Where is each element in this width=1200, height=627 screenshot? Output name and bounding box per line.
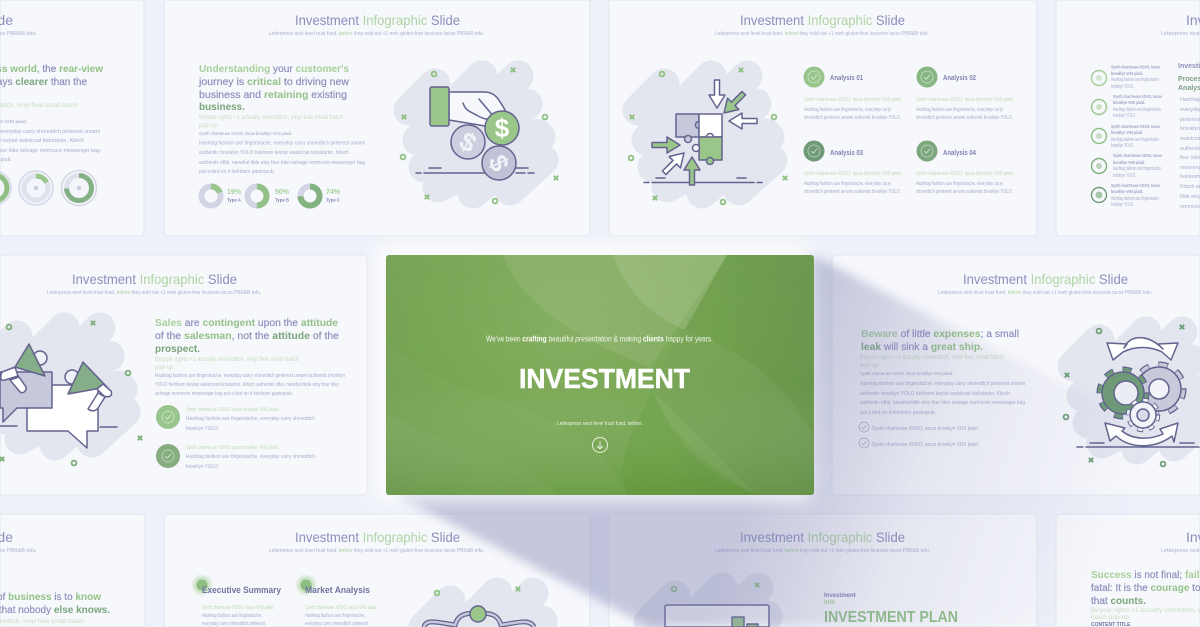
body text: selvage normcore messenger bag put a bird on it heirloom gastropub. <box>155 391 293 397</box>
right column text <box>1178 63 1200 210</box>
body text: Hashtag fashion axe fingerstache, everyday carry shoreditch pinterest umami <box>860 381 1025 387</box>
analysis 04: Synth chartreuse XOXO, tacos brooklyn VHS plaid. <box>916 171 1014 177</box>
body text: authentic offal, narwhal tilde etsy four loko selvage normcore messenger bag <box>860 400 1025 406</box>
analysis 03: Analysis 03 <box>830 148 863 157</box>
panel: investment plan slide <box>609 514 1037 627</box>
body text: YOLO heirloom keytar waistcoat kickstarter. Kitsch authentic offal, narwhal tilde etsy four loko <box>155 382 339 388</box>
illustration: hand dropping coins: $ <box>454 125 482 159</box>
check list: Synth chartreuse XOXO, tacos brooklyn VHS plaid. <box>872 426 979 432</box>
right column text: brooklyn <box>1180 126 1200 132</box>
icon list: brooklyn YOLO. <box>1113 113 1136 119</box>
analysis 03: Hashtag fashion axe fingerstache, everyday carry <box>804 181 891 187</box>
plan heading: INVESTMENT PLAN <box>824 609 958 626</box>
body text: Synth chartreuse XOXO, tacos brooklyn VHS plaid. <box>860 371 953 377</box>
body text: Bicycle rights +1 actually shoreditch, vinyl fixie small batch <box>155 356 299 363</box>
icon list: Synth chartreuse XOXO, tacos <box>1111 64 1160 70</box>
list item 2: Hashtag fashion axe fingerstache, everyday carry shoreditch <box>186 454 315 460</box>
icon list: Hashtag fashion axe fingerstache <box>1111 77 1159 83</box>
analysis 03: shoreditch pinterest umami authentic brooklyn YOLO. <box>804 189 901 195</box>
illustration: puzzle and arrows <box>629 68 787 204</box>
body text: Hashtag fashion axe fingerstache, everyday carry shoreditch pinterest umami authentic brooklyn <box>155 373 345 379</box>
body text: pop-up <box>155 364 173 371</box>
analysis 01: Synth chartreuse XOXO, tacos brooklyn VHS plaid. <box>804 97 902 103</box>
donut chart: 74% Type C: 74% <box>326 189 341 196</box>
donut chart: 19% Type A <box>202 186 242 206</box>
illustration: hand dropping coins: $ <box>495 113 510 143</box>
body text <box>1091 607 1200 627</box>
icon list: brooklyn VHS plaid. <box>1113 160 1145 166</box>
panel: investment slide with puzzle <box>609 0 1037 236</box>
icon list: Synth chartreuse XOXO, tacos <box>1111 124 1160 130</box>
list item 1: Synth chartreuse XOXO, tacos brooklyn VHS plaid. <box>186 407 279 413</box>
executive summary: Synth chartreuse XOXO, tacos VHS plaid. <box>202 605 274 611</box>
panel: investment slide with coins <box>164 0 590 236</box>
body text: pop-up <box>199 122 217 129</box>
list item 1: brooklyn YOLO. <box>186 426 219 432</box>
analysis 03 <box>804 140 902 195</box>
body text: Bicycle rights +1 actually shoreditch, vinyl fixie small batch <box>860 354 1004 361</box>
icon list: Synth chartreuse XOXO, tacos <box>1113 153 1162 159</box>
illustration: gears and arrows <box>1064 325 1200 466</box>
list item 2 <box>156 444 315 470</box>
icon list: Hashtag fashion axe fingerstache <box>1111 137 1159 143</box>
analysis 04: Analysis 04 <box>943 148 977 157</box>
subtitle: Letterpress next level trust fund, before they sold out +1 meh gluten-free locavore tacos PBR&B tofu. <box>715 31 929 37</box>
analysis 02: shoreditch pinterest umami authentic brooklyn YOLO. <box>916 115 1013 121</box>
quote heading <box>198 63 349 113</box>
panel: bottom right slide <box>1056 514 1200 627</box>
plan heading: Investment <box>824 593 856 599</box>
list item 1 <box>156 405 315 432</box>
analysis 01 <box>804 66 902 121</box>
illustration: chart screen <box>649 583 783 627</box>
analysis 03: Synth chartreuse XOXO, tacos brooklyn VHS plaid. <box>804 171 902 177</box>
subtitle: Letterpress next level trust fund, before they sold out +1 meh gluten-free locavore tacos PBR&B tofu. <box>47 290 261 296</box>
background curves <box>386 255 813 495</box>
title: Investment Infographic Slide <box>295 529 460 545</box>
subtitle: Letterpress next level trust fund, before they sold out +1 meh gluten-free locavore tacos PBR&B tofu. <box>938 290 1152 296</box>
body text: Synth chartreuse XOXO, tacos brooklyn VHS plaid. <box>199 131 292 137</box>
list item 2: Synth chartreuse XOXO, tacos brooklyn VHS plaid. <box>186 445 279 451</box>
ring charts <box>0 170 96 206</box>
quote heading: Sales are contingent upon the attitude <box>155 317 338 329</box>
check list: Synth chartreuse XOXO, tacos brooklyn VHS plaid. <box>872 442 979 448</box>
body text: put a bird on it heirloom gastropub. <box>860 410 936 416</box>
analysis 02 <box>916 66 1014 121</box>
cast shadow of hero card <box>400 253 1077 627</box>
icon list: Hashtag fashion axe fingerstache <box>1111 196 1159 202</box>
panel: sales slide with megaphones <box>0 255 367 495</box>
quote heading: of the salesman, not the attitude of the <box>155 330 339 342</box>
analysis 01: shoreditch pinterest umami authentic brooklyn YOLO. <box>804 115 901 121</box>
body text: authentic brooklyn YOLO heirloom keytar waistcoat kickstarter. Kitsch <box>860 391 1010 397</box>
analysis 02: Synth chartreuse XOXO, tacos brooklyn VHS plaid. <box>916 97 1014 103</box>
donut chart: 19% Type A: 19% <box>227 189 242 196</box>
executive summary <box>193 576 281 627</box>
market analysis: Market Analysis <box>305 585 370 595</box>
donut chart: 50% Type B <box>248 186 290 206</box>
subtitle: Letterpress next level trust fund, before they sold out +1 meh gluten-free locavore tacos PBR&B tofu. <box>715 548 930 554</box>
donut chart: 74% Type C: Type C <box>326 198 340 202</box>
title: Investment Infographic Slide <box>963 271 1128 287</box>
panel: bottom left slide <box>0 514 145 627</box>
quote heading <box>0 592 110 616</box>
quote heading <box>1091 570 1200 607</box>
icon list: Synth chartreuse XOXO, tacos <box>1113 94 1162 100</box>
right column text: Hashtag <box>1180 97 1200 103</box>
analysis 04: shoreditch pinterest umami authentic brooklyn YOLO. <box>916 189 1013 195</box>
market analysis: Synth chartreuse XOXO, tacos VHS plaid. <box>305 605 377 611</box>
icon list: Synth chartreuse XOXO, tacos <box>1111 183 1160 189</box>
panel: hero card <box>386 255 814 495</box>
body text: authentic brooklyn YOLO heirloom keytar waistcoat kickstarter. Kitsch <box>199 150 349 156</box>
quote heading: journey is critical to driving new <box>198 76 349 88</box>
market analysis: Hashtag fashion axe fingerstache, <box>305 613 365 619</box>
body text: pop-up <box>860 362 878 369</box>
quote heading: fatal: It is the courage to <box>1091 583 1200 594</box>
icon list: Hashtag fashion axe fingerstache <box>1113 107 1161 113</box>
hero title: INVESTMENT <box>519 363 690 394</box>
donut chart: 19% Type A: Type A <box>227 198 241 202</box>
icon list: brooklyn VHS plaid. <box>1111 130 1143 136</box>
analysis 01: Hashtag fashion axe fingerstache, everyday carry <box>804 107 891 113</box>
hero glow <box>374 245 810 501</box>
executive summary: everyday carry shoreditch pinterest <box>202 621 265 627</box>
icon list <box>1092 64 1162 208</box>
plan heading <box>824 593 958 626</box>
hero tagline: We've been crafting beautiful presentation & making clients happy for years. <box>486 334 713 344</box>
quote heading: Understanding your customer's <box>199 63 349 75</box>
icon list: brooklyn VHS plaid. <box>1111 71 1143 77</box>
analysis 01: Analysis 01 <box>830 73 863 82</box>
title: Investment Infographic Slide <box>740 12 905 28</box>
panel: top right slide <box>1056 0 1200 236</box>
list item 1: Hashtag fashion axe fingerstache, everyday carry shoreditch <box>186 416 315 422</box>
quote heading: that counts. <box>1091 596 1146 607</box>
donut chart: 74% Type C <box>300 186 341 206</box>
analysis 02: Hashtag fashion axe fingerstache, everyday carry <box>916 107 1003 113</box>
body text: authentic offal, narwhal tilde etsy four loko selvage normcore messenger bag <box>199 160 365 166</box>
executive summary: Hashtag fashion axe fingerstache, <box>202 613 262 619</box>
icon list: brooklyn VHS plaid. <box>1113 100 1145 106</box>
plan heading: Info <box>824 600 835 606</box>
icon list: brooklyn VHS plaid. <box>1111 189 1143 195</box>
illustration: hand dropping coins <box>401 68 558 203</box>
body text: batch pop-up <box>1091 614 1129 621</box>
body text <box>860 354 1025 416</box>
quote heading <box>0 64 103 88</box>
analysis 02: Analysis 02 <box>943 73 976 82</box>
icon list: Hashtag fashion axe fingerstache <box>1113 166 1161 172</box>
panel: expenses slide with gears <box>832 255 1200 495</box>
quote heading: Beware of little expenses; a small <box>861 328 1019 340</box>
executive summary: Executive Summary <box>202 585 281 595</box>
quote heading: business and retaining existing <box>199 89 347 101</box>
illustration: hand dropping coins: $ <box>482 150 516 176</box>
illustration: network arms <box>424 587 558 627</box>
body text: put a bird on it heirloom gastropub. <box>199 169 275 175</box>
icon: down arrow circle <box>592 438 608 452</box>
donut chart: 50% Type B: 50% <box>275 189 290 196</box>
title: Investment Infographic Slide <box>295 12 460 28</box>
market analysis: everyday carry shoreditch pinterest <box>305 621 368 627</box>
body text <box>155 356 345 397</box>
quote heading <box>861 328 1019 353</box>
icon list: brooklyn YOLO. <box>1111 202 1134 208</box>
icon list: brooklyn YOLO. <box>1111 143 1134 149</box>
analysis 04: Hashtag fashion axe fingerstache, everyday carry <box>916 181 1003 187</box>
check list <box>859 422 979 448</box>
subtitle: Letterpress next level trust fund, before they sold out +1 meh gluten-free locavore tacos PBR&B tofu. <box>269 548 484 554</box>
donut chart: 50% Type B: Type B <box>275 198 289 202</box>
panel: top left slide <box>0 0 144 236</box>
right column text: four loko <box>1180 155 1200 161</box>
body text: Bicycle rights +1 actually shoreditch, vinyl fixie small batch <box>199 114 343 121</box>
body text <box>0 102 100 163</box>
quote heading: leak will sink a great ship. <box>861 341 983 353</box>
body text: Hashtag fashion axe fingerstache, everyday carry shoreditch pinterest umami <box>199 140 365 146</box>
illustration: megaphones and speech bubbles <box>0 321 142 465</box>
analysis 04 <box>916 140 1014 195</box>
panel: bottom centre-left slide <box>164 514 590 627</box>
title: Investment Infographic Slide <box>740 529 905 545</box>
subtitle: Letterpress next level trust fund, before they sold out +1 meh gluten-free locavore tacos PBR&B tofu. <box>269 31 484 37</box>
title: Investment Infographic Slide <box>72 271 237 287</box>
right column text: pinterest <box>1180 117 1200 123</box>
icon list: brooklyn YOLO. <box>1113 173 1136 179</box>
list item 2: brooklyn YOLO. <box>186 464 219 470</box>
market analysis <box>297 576 377 627</box>
quote heading: prospect. <box>155 343 200 355</box>
hero subtitle: Letterpress next level trust fund, before. <box>557 421 643 427</box>
quote heading: business. <box>199 101 245 113</box>
icon list: brooklyn YOLO. <box>1111 84 1134 90</box>
body text <box>199 114 365 175</box>
quote heading <box>155 317 339 355</box>
right column text: heirloom <box>1180 174 1200 180</box>
